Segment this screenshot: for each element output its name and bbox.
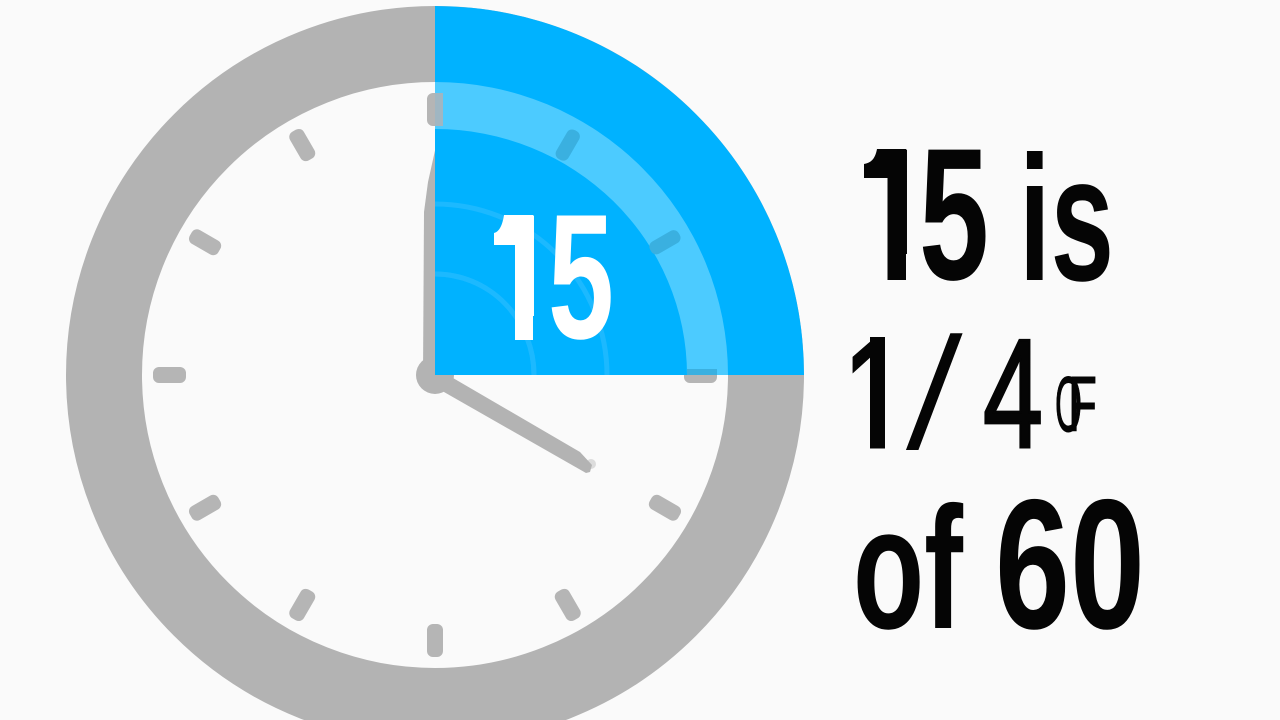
statement text — [840, 109, 1145, 668]
line two: 1/4 — [840, 307, 1043, 481]
clock hub — [416, 356, 454, 394]
faint concentric arcs — [435, 204, 607, 375]
vertical clock hand — [423, 146, 447, 375]
hour tick marks — [153, 93, 717, 657]
wedge number 15 — [435, 177, 614, 376]
wedge number 15: 1 — [504, 177, 549, 376]
line one: 15 is: 1 — [877, 109, 922, 319]
line three: of 60: 60 — [995, 462, 1145, 668]
line three: of 60: of — [853, 470, 964, 665]
lighter ring band in wedge — [435, 82, 728, 375]
angled clock hand — [437, 378, 596, 473]
ticks seen through wedge — [435, 93, 717, 375]
line two: 1/4: 4 — [983, 307, 1043, 480]
clock ring — [104, 44, 766, 706]
clock face — [104, 44, 766, 706]
wedge number 15: 5 — [548, 177, 614, 376]
line two: small of: O — [1055, 360, 1082, 448]
line two: 1/4: 1 — [842, 307, 910, 480]
line one: 15 is: 5 — [919, 109, 989, 319]
line two: small of — [1055, 360, 1097, 448]
line two: 1/4: / — [903, 308, 966, 481]
line one: 15 is: is — [1019, 119, 1114, 318]
line one: 15 is — [855, 109, 1114, 319]
blue quarter wedge — [435, 6, 804, 375]
line two: small of: F — [1068, 360, 1097, 448]
line three: of 60 — [853, 462, 1145, 668]
